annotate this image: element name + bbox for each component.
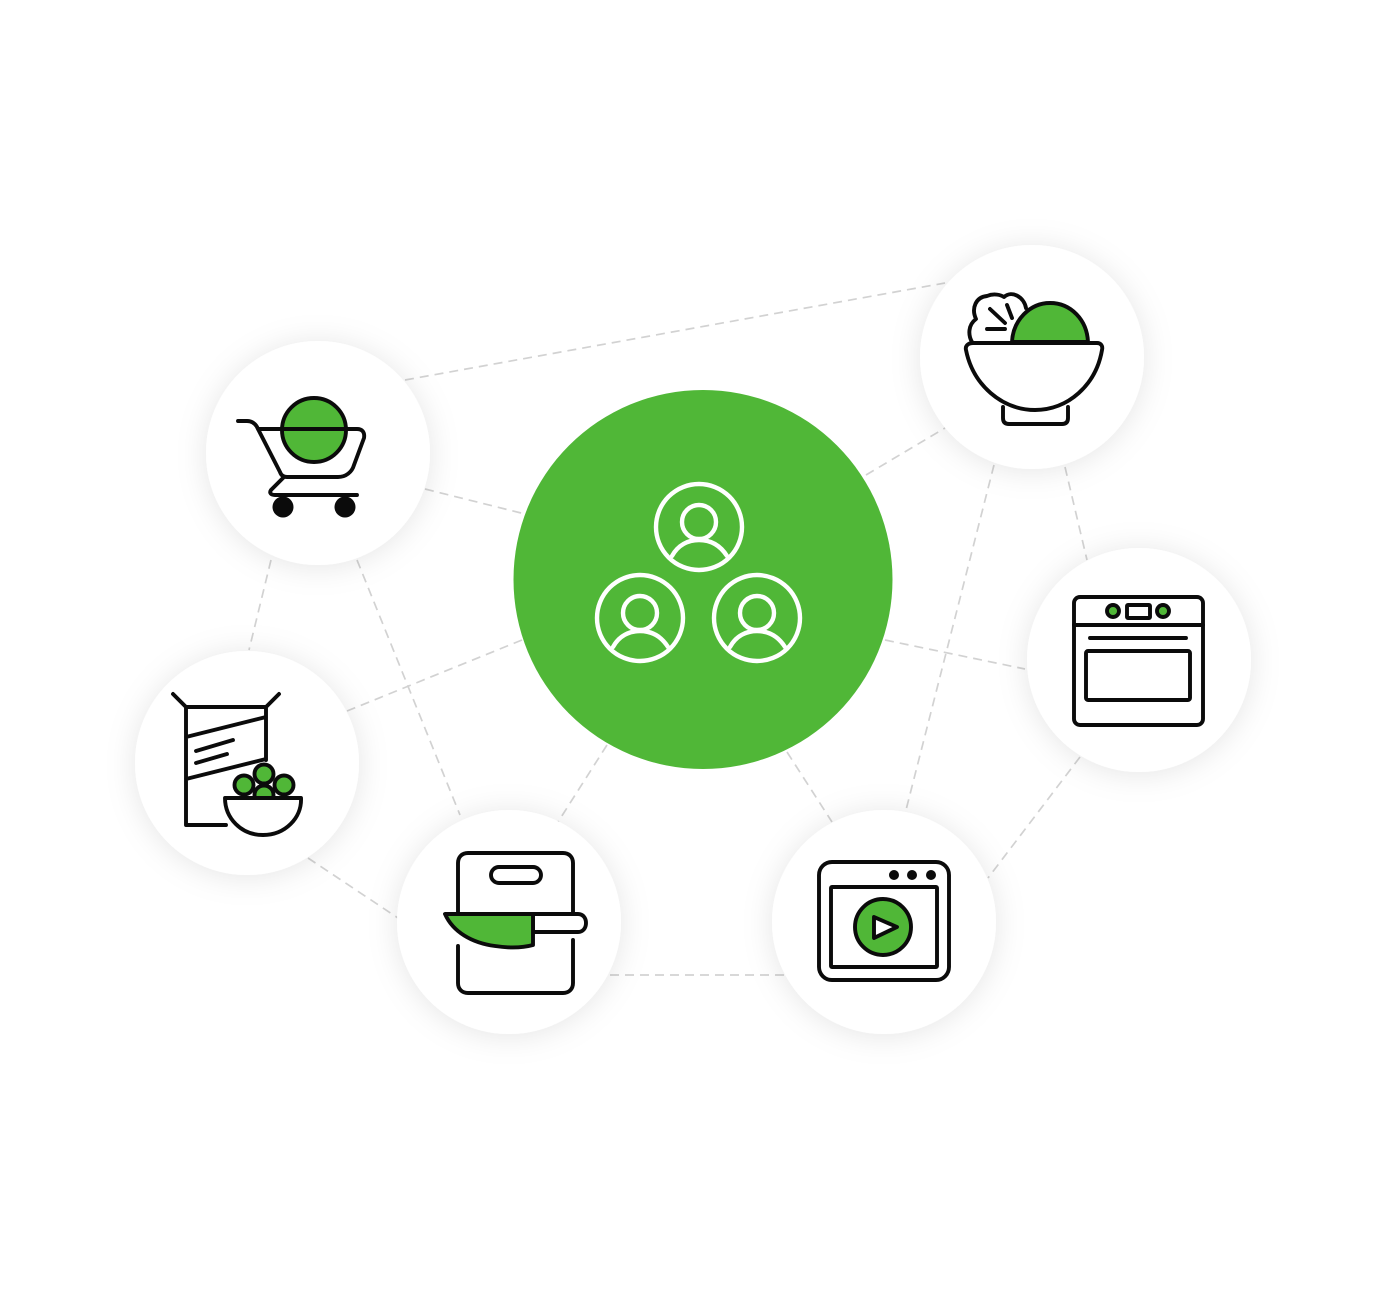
icon: left wheel — [272, 496, 294, 518]
icon: cart frame — [238, 421, 364, 495]
icon: cereal box — [173, 694, 279, 825]
icon: oven body — [1074, 597, 1203, 725]
node: cutting board and knife — [397, 810, 621, 1034]
icon: left knob — [1107, 605, 1119, 617]
icon: right wheel — [334, 496, 356, 518]
icon: cereal pieces — [234, 764, 294, 804]
node: video recipe — [772, 810, 996, 1034]
icon: play button — [855, 899, 911, 955]
icon: bowl — [966, 343, 1102, 410]
central green hub — [514, 390, 892, 769]
node: cereal box and bowl — [135, 651, 359, 875]
node: shopping cart — [206, 341, 430, 565]
icon: board handle slot — [491, 867, 541, 883]
dashed network connections — [249, 283, 1087, 975]
icon: lettuce leaf — [969, 294, 1026, 342]
icon: knife handle — [533, 914, 586, 932]
node: salad bowl — [920, 245, 1144, 469]
icon: browser window — [819, 862, 949, 980]
icon: bowl base — [1003, 407, 1068, 424]
icon: person lower right — [714, 575, 800, 661]
icon: person lower left — [597, 575, 683, 661]
icon: cutting board — [458, 853, 573, 993]
icon: green ball in cart — [282, 398, 346, 462]
icon: video frame — [831, 887, 937, 967]
icon: play triangle — [874, 917, 897, 938]
icon: display — [1127, 605, 1150, 618]
icon: window dots — [889, 870, 936, 880]
icon: person top — [656, 484, 742, 570]
icon: small bowl — [225, 798, 301, 835]
icon: rack line — [1090, 636, 1186, 640]
icon: green dome — [1012, 303, 1088, 342]
node: oven — [1027, 548, 1251, 772]
icon: right knob — [1157, 605, 1169, 617]
icon: control panel divider — [1074, 623, 1203, 627]
icon: oven window — [1086, 651, 1190, 700]
icon: knife blade — [445, 914, 533, 947]
